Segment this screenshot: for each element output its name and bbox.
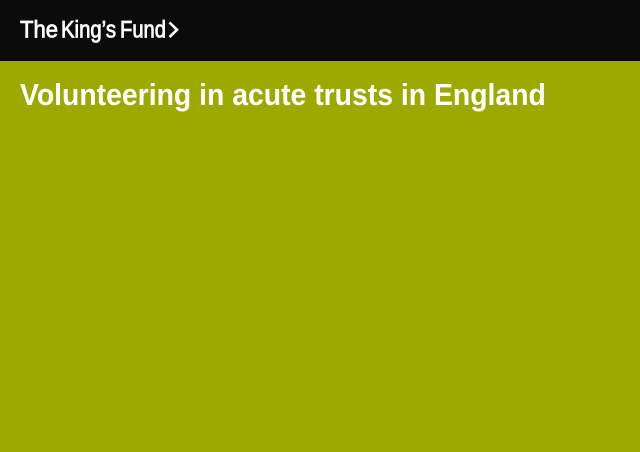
logo: The King's Fund: Fund (120, 16, 166, 44)
title: Volunteering in acute trusts in England (20, 77, 546, 112)
logo: The King's Fund: King’s (61, 16, 116, 44)
logo: The King's Fund: The (20, 16, 58, 44)
header band (0, 0, 640, 61)
logo: The King's Fund (20, 16, 179, 44)
